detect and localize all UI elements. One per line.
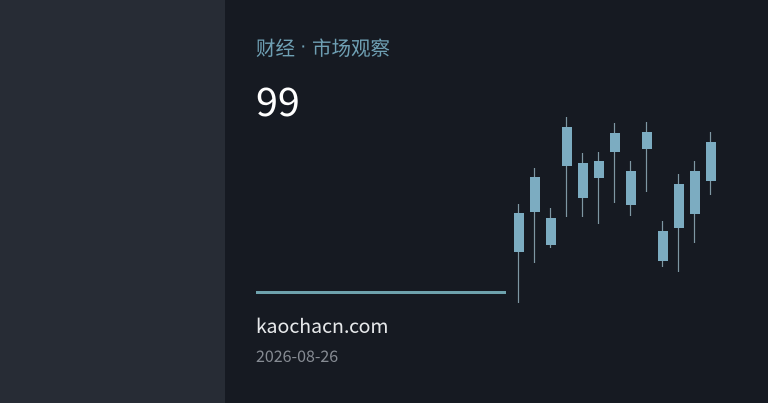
heading: category label: · [300, 35, 306, 57]
heading: category label [256, 32, 390, 61]
heading: category label: 财经 [256, 32, 295, 61]
heading: category label: 市场观察 [312, 32, 390, 61]
accent rule [256, 291, 506, 294]
site name: kaochacn.com [256, 310, 388, 339]
title: number: 99 [256, 71, 300, 128]
panel: left sidebar [0, 0, 225, 403]
date: 2026-08-26 [256, 343, 338, 367]
